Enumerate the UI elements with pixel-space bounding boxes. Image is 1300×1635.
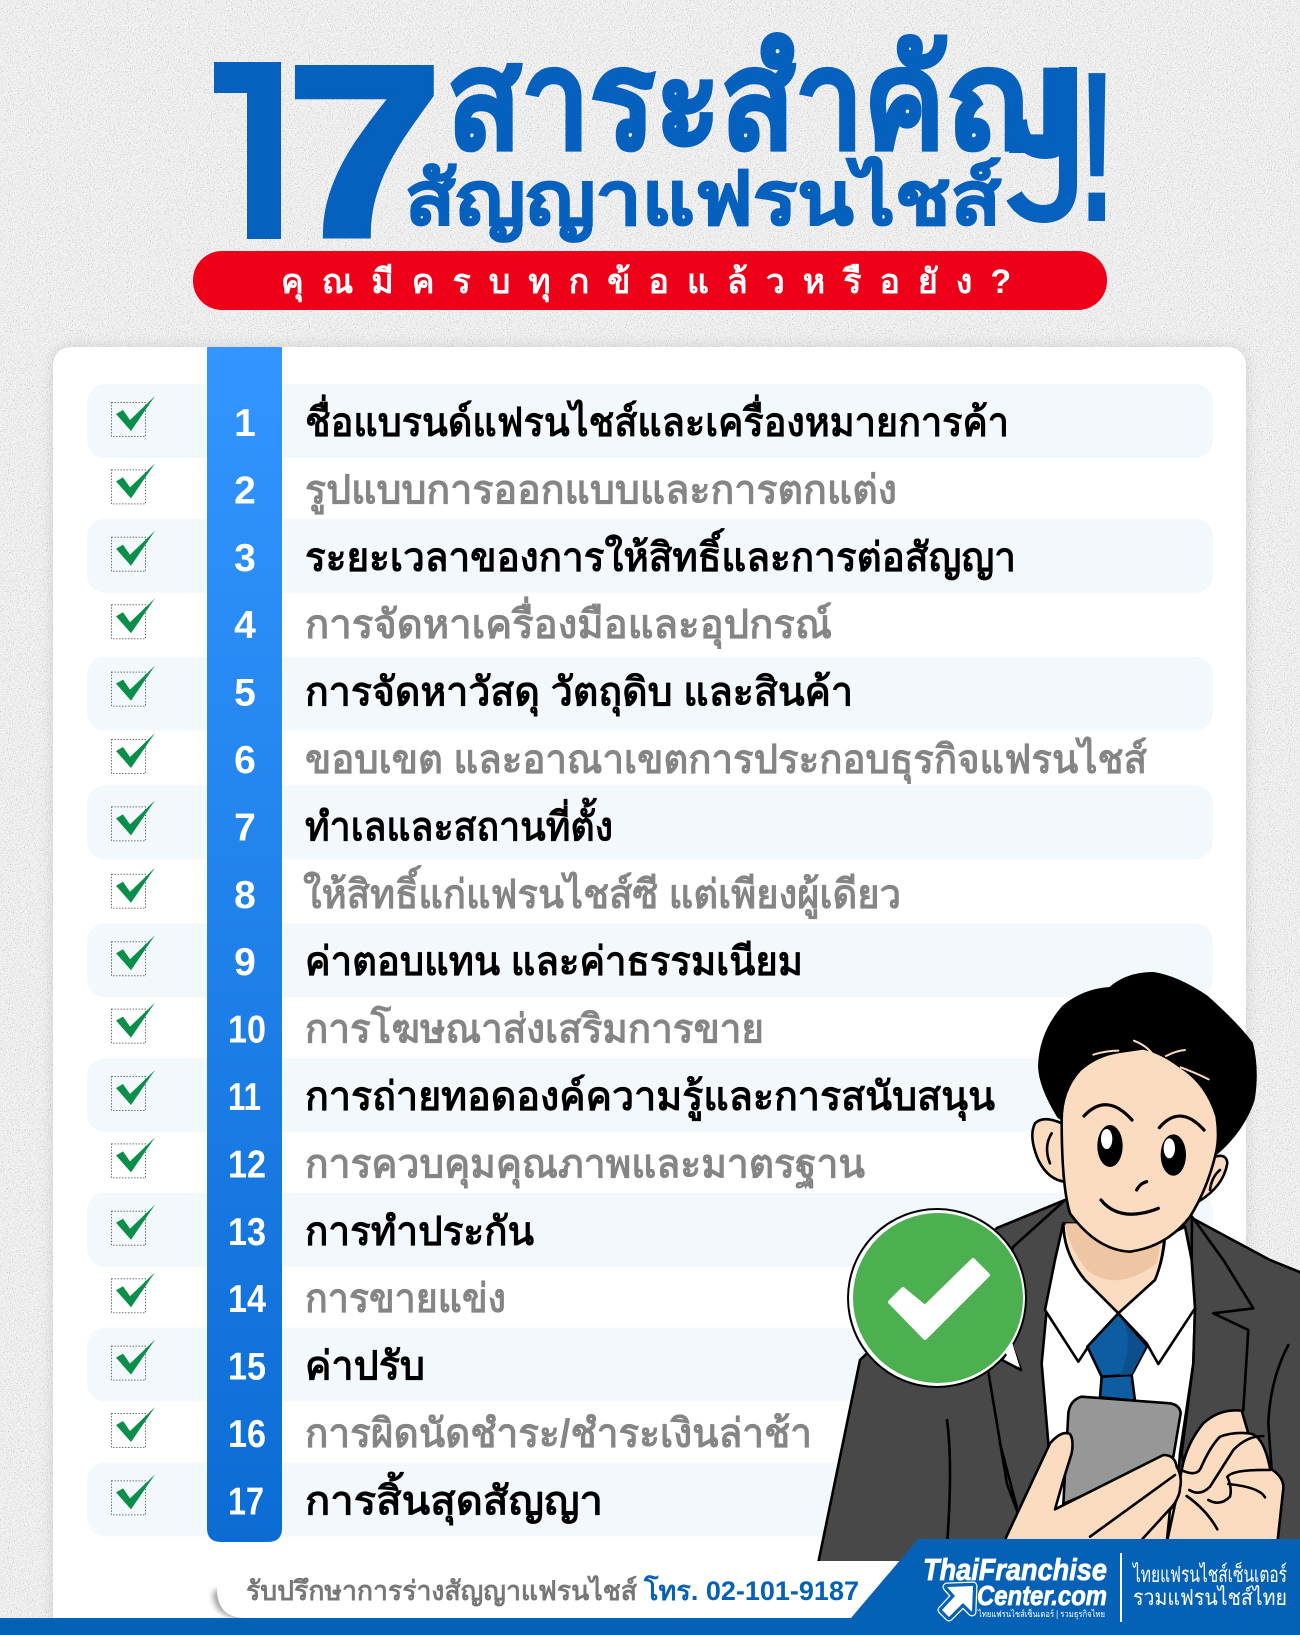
item 9: 9: [234, 941, 256, 984]
item 1: ชื่อแบรนด์แฟรนไชส์และเครื่องหมายการค้า: [305, 394, 1009, 445]
shirt and tie, phone and hands: [1000, 1217, 1288, 1543]
title number 17: 1: [200, 13, 340, 292]
item 17: 17: [228, 1480, 264, 1523]
title line 1: สาระสำคั: [447, 24, 947, 178]
right hand: [1167, 1410, 1283, 1543]
item 11: 11: [228, 1076, 261, 1119]
item 10: 10: [228, 1009, 266, 1052]
item 4: 4: [234, 604, 256, 647]
neck: [1063, 1223, 1165, 1313]
title line 2: สัญญาแฟรนไชส์: [405, 155, 1002, 242]
title swash: [1014, 67, 1068, 214]
eyebrows, nose and mouth: [1084, 1105, 1204, 1214]
title line 1: ญ: [948, 24, 1066, 183]
consult text: รับปรึกษาการร่างสัญญาแฟรนไชส์: [246, 1575, 638, 1607]
item 16: การผิดนัดชำระ/ชำระเงินล่าช้า: [305, 1412, 812, 1456]
item 15: 15: [228, 1346, 266, 1389]
item 17: [112, 1471, 603, 1526]
jacket: [818, 1200, 1300, 1564]
item 10: การโฆษณาส่งเสริมการขาย: [305, 1006, 764, 1052]
item 8: [112, 865, 901, 919]
item 13: [112, 1205, 534, 1254]
tie: [1087, 1313, 1147, 1401]
item 14: [112, 1272, 506, 1321]
subtitle pill: [193, 251, 1107, 310]
item 10: [112, 1003, 764, 1052]
jacket fold lines: [947, 1202, 1063, 1545]
item 14: 14: [228, 1278, 266, 1321]
item 6: 6: [234, 739, 256, 782]
illustration: businessman with phone: [818, 973, 1300, 1564]
item 2: รูปแบบการออกแบบและการตกแต่ง: [305, 468, 897, 514]
item 7: ทำเลและสถานที่ตั้ง: [305, 797, 613, 849]
item 2: 2: [234, 469, 256, 512]
item 2: [112, 463, 897, 514]
right ear: [1198, 1156, 1227, 1202]
item 12: 12: [228, 1143, 266, 1186]
left hand: [1003, 1433, 1181, 1543]
item 11: [112, 1070, 995, 1122]
right lapel: [1182, 1217, 1253, 1480]
face: [1062, 1048, 1218, 1252]
logo tagline: ไทยแฟรนไชส์เซ็นเตอร์ | รวมธุรกิจไทย: [977, 1607, 1105, 1620]
title exclamation mark: !: [1077, 26, 1117, 267]
title: [214, 32, 1106, 243]
logo arrow icon: [942, 1586, 973, 1617]
number column: [207, 347, 282, 1542]
item 5: [112, 666, 853, 718]
item 16: 16: [228, 1413, 266, 1456]
item 9: ค่าตอบแทน และค่าธรรมเนียม: [305, 940, 803, 984]
consult pill: [217, 1561, 905, 1618]
item 6: [112, 733, 1148, 785]
item 8: ให้สิทธิ์แก่แฟรนไชส์ซี แต่เพียงผู้เดียว: [303, 865, 901, 919]
logo panel: Center.com: [977, 1580, 1107, 1611]
footer bar: [0, 1618, 1300, 1635]
sleeve line: [1000, 1345, 1288, 1507]
item 4: การจัดหาเครื่องมือและอุปกรณ์: [305, 596, 832, 650]
row bands: [87, 384, 1213, 1536]
logo panel: [800, 1539, 1300, 1635]
left ear: [1032, 1119, 1065, 1182]
item 8: 8: [234, 874, 256, 917]
item 15: [112, 1340, 425, 1389]
item 3: 3: [234, 537, 256, 580]
eyes: [1097, 1125, 1186, 1176]
item 13: การทำประกัน: [305, 1210, 534, 1254]
item 1: 1: [234, 402, 256, 445]
item 16: [112, 1407, 812, 1456]
item 17: การสิ้นสุดสัญญา: [305, 1471, 603, 1526]
item 7: 7: [234, 806, 256, 849]
consult pill shadow: [213, 1578, 300, 1618]
item 15: ค่าปรับ: [305, 1345, 425, 1389]
item 6: ขอบเขต และอาณาเขตการประกอบธุรกิจแฟรนไชส์: [305, 736, 1148, 785]
title number 17: [214, 62, 434, 239]
check bubble: [847, 1208, 1027, 1388]
collar: [1045, 1223, 1195, 1364]
item 1: [112, 394, 1009, 445]
item 9: [112, 935, 803, 984]
head: [1032, 973, 1255, 1252]
logo wordmark: ThaiFranchise: [923, 1552, 1107, 1587]
item 4: [112, 596, 832, 650]
item 12: การควบคุมคุณภาพและมาตรฐาน: [305, 1142, 865, 1190]
phone number: โทร. 02-101-9187: [643, 1574, 859, 1606]
item 12: [112, 1137, 865, 1190]
item 3: [112, 528, 1016, 581]
shirt: [1042, 1223, 1195, 1543]
item 5: การจัดหาวัสดุ วัตถุดิบ และสินค้า: [305, 671, 853, 718]
item 11: การถ่ายทอดองค์ความรู้และการสนับสนุน: [305, 1074, 995, 1122]
hair highlights: [1093, 1041, 1209, 1079]
phone: [1063, 1397, 1181, 1504]
title number 17: 7: [287, 17, 442, 287]
subtitle pill: คุณมีครบทุกข้อแล้วหรือยัง?: [281, 263, 1029, 303]
item 7: [112, 797, 613, 849]
item 13: 13: [228, 1211, 266, 1254]
panel: checklist card: [53, 347, 1246, 1635]
item 3: ระยะเวลาของการให้สิทธิ์และการต่อสัญญา: [305, 528, 1016, 581]
item 14: การขายแข่ง: [305, 1277, 506, 1321]
hair: [1039, 973, 1255, 1160]
card shadow: [53, 347, 1246, 1635]
item 5: 5: [234, 672, 256, 715]
